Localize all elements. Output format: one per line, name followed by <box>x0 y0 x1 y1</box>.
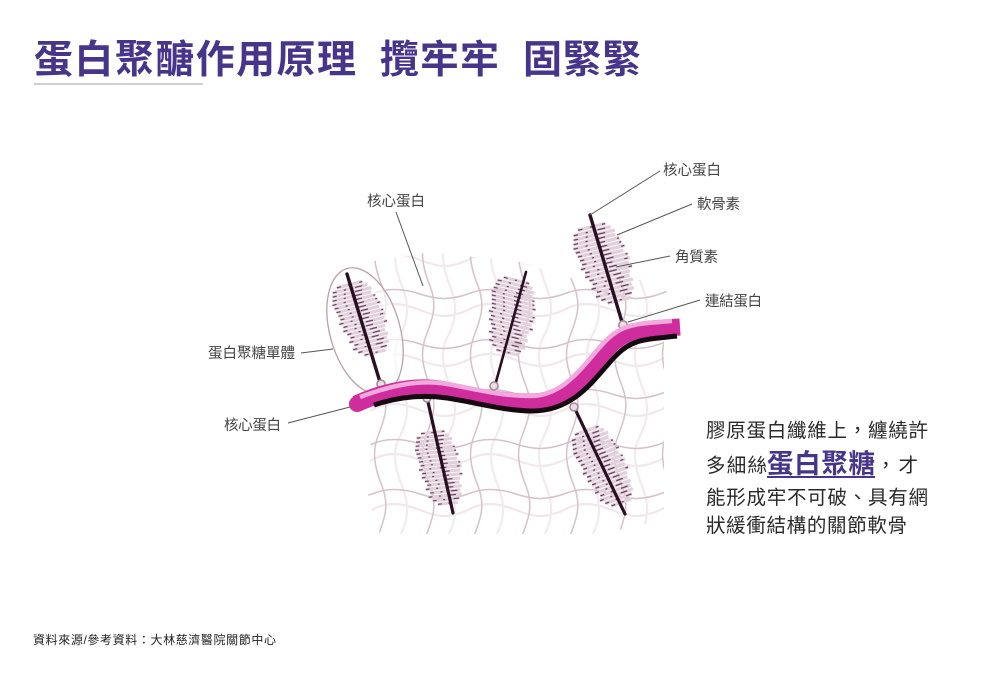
description text: 能形成牢不可破、具有網 <box>706 487 928 509</box>
label: aggrecan monomer <box>208 345 333 362</box>
label: core protein top left: 核心蛋白 <box>367 193 425 210</box>
description text: 狀緩衝結構的關節軟骨 <box>706 515 907 537</box>
description text <box>706 420 928 537</box>
description text: 多細絲 <box>706 455 767 477</box>
label: keratan sulfate <box>616 248 718 267</box>
source note: 資料來源/參考資料：大林慈濟醫院關節中心 <box>33 632 276 647</box>
label: chondroitin sulfate: 軟骨素 <box>697 196 740 213</box>
diagram: aggrecan on collagen <box>313 215 680 540</box>
label: core protein top right <box>590 162 721 215</box>
label: aggrecan monomer: 蛋白聚糖單體 <box>208 345 295 362</box>
title: 蛋白聚醣作用原理 <box>34 39 356 82</box>
description text: 膠原蛋白纖維上，纏繞許 <box>706 420 928 442</box>
highlighted term: 蛋白聚糖 <box>767 449 875 479</box>
monomer 4 <box>413 394 465 513</box>
label: core protein top left <box>367 193 425 286</box>
monomer ellipse outline <box>313 259 417 403</box>
label: link protein <box>628 293 762 322</box>
title: 攬牢牢 <box>380 39 499 82</box>
monomer 5 <box>567 403 639 514</box>
label: core protein bottom left <box>224 407 350 434</box>
title underline <box>34 83 203 85</box>
monomer 3 <box>569 215 639 329</box>
collagen mesh <box>368 253 668 534</box>
title <box>34 39 641 82</box>
label: keratan sulfate: 角質素 <box>675 248 718 266</box>
label: chondroitin sulfate <box>617 196 740 235</box>
monomer 2 <box>478 272 543 390</box>
label: core protein bottom left: 核心蛋白 <box>224 417 281 434</box>
label: link protein: 連結蛋白 <box>705 293 762 310</box>
description text: ，才 <box>876 455 918 477</box>
hyaluronic backbone <box>349 321 680 412</box>
label: core protein top right: 核心蛋白 <box>663 162 721 179</box>
monomer 1 <box>329 274 394 388</box>
title: 固緊緊 <box>523 39 641 82</box>
